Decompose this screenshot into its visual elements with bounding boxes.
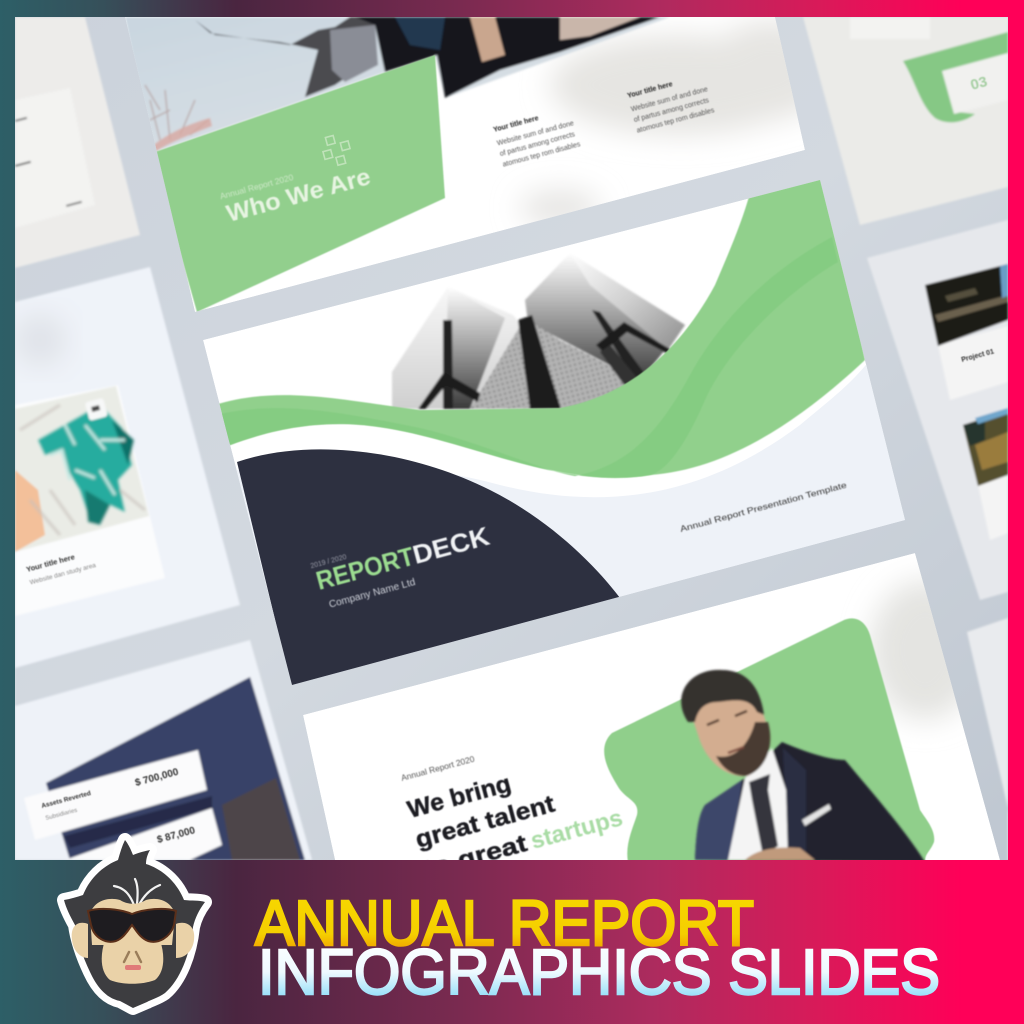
dark title shape bbox=[237, 449, 620, 690]
project photo 1 bbox=[925, 264, 1008, 346]
finance figures: Assets Reverted bbox=[41, 790, 92, 810]
title: infographics slides: INFOGRAPHICS SLIDES bbox=[258, 936, 940, 1008]
text block 2: Website sum of and done bbox=[630, 86, 709, 113]
project photo 2 bbox=[963, 411, 1008, 486]
muzzle bbox=[102, 940, 163, 984]
finance figures: $ 700,000 bbox=[134, 767, 180, 789]
green wave bbox=[215, 170, 865, 478]
map image bbox=[15, 386, 149, 552]
headline: We bring bbox=[405, 770, 514, 824]
project card 2 bbox=[978, 475, 1008, 540]
panel: great talent slide bbox=[303, 553, 1000, 884]
card: location bbox=[15, 385, 165, 616]
text block 1: Website sum of and done bbox=[496, 120, 575, 147]
slide base bbox=[303, 553, 1000, 860]
finance figures: $ 87,000 bbox=[156, 825, 197, 846]
title: report deck: 2019 / 2020 bbox=[310, 554, 347, 570]
headline: startups bbox=[528, 805, 626, 855]
caption: annual report template: Annual Report Presentation Template bbox=[679, 480, 848, 534]
heading: who we are: Who We Are bbox=[224, 163, 374, 228]
sunglasses bbox=[88, 909, 176, 942]
navy image bbox=[46, 677, 305, 860]
text block 2: atomous tep rom disables bbox=[636, 107, 716, 135]
forehead bbox=[90, 899, 175, 945]
skyscraper image bbox=[392, 253, 685, 409]
panel: bottom right sliver slide bbox=[967, 618, 1020, 860]
green title panel bbox=[152, 55, 445, 312]
panel: left bottom finance slide bbox=[15, 640, 312, 860]
text block 2: Your title here bbox=[627, 81, 674, 100]
darker wave layer bbox=[215, 237, 838, 478]
heading: who we are: Annual Report 2020 bbox=[219, 172, 295, 201]
text block 1: Your title here bbox=[493, 115, 540, 134]
eyes and mouth bbox=[707, 711, 747, 725]
icon: network mark bbox=[322, 134, 351, 166]
slide base bbox=[125, 17, 805, 312]
ears bbox=[72, 923, 88, 958]
lower pale background bbox=[236, 364, 905, 597]
green blob bbox=[604, 618, 934, 862]
card 03 bbox=[942, 53, 1008, 114]
text block: annual report label: Annual Report 2020 bbox=[400, 754, 476, 783]
label 03: 03 bbox=[969, 73, 989, 94]
title: report deck: Company Name Ltd bbox=[328, 577, 417, 611]
shirt bbox=[728, 748, 788, 860]
text block 1: of partus among corrects bbox=[499, 131, 576, 158]
panel: top-right agenda slide bbox=[803, 17, 1008, 225]
project card 1 bbox=[938, 326, 1008, 400]
pocket square bbox=[802, 804, 831, 826]
headline bbox=[405, 745, 626, 884]
caption: map card: Your title here bbox=[25, 552, 76, 574]
green curve bbox=[903, 32, 1008, 122]
nose and mouth bbox=[124, 952, 141, 962]
slide base bbox=[203, 198, 866, 498]
title: report deck: REPORT bbox=[313, 541, 417, 596]
text block 2 bbox=[626, 82, 715, 134]
cloud shading bbox=[870, 580, 980, 720]
title: report deck bbox=[310, 526, 491, 608]
text block 1: atomous tep rom disables bbox=[502, 141, 582, 169]
panel: left map slide bbox=[14, 267, 240, 668]
man portrait bbox=[681, 670, 925, 862]
panel: right projects slide bbox=[867, 220, 1008, 600]
text block 2: of partus among corrects bbox=[633, 97, 710, 124]
hand bbox=[745, 848, 815, 860]
beard bbox=[716, 722, 770, 776]
panel: top-left slide bbox=[15, 17, 140, 268]
finance figures: Subsidiaries bbox=[45, 808, 78, 822]
tie bbox=[749, 774, 778, 856]
panel: report deck cover slide bbox=[200, 170, 920, 700]
hair bbox=[681, 670, 764, 722]
headline: to great bbox=[421, 830, 530, 884]
card 2 bbox=[65, 808, 222, 860]
panel: who we are slide bbox=[125, 17, 830, 312]
hair highlight bbox=[114, 879, 160, 905]
card 1 bbox=[24, 750, 207, 840]
sticker head with white outline bbox=[64, 840, 205, 1008]
jacket bbox=[695, 742, 925, 862]
title: report deck: DECK bbox=[409, 521, 493, 570]
face bbox=[688, 688, 769, 776]
caption: map card bbox=[26, 554, 96, 585]
collage backdrop bbox=[15, 17, 1008, 860]
text block 1 bbox=[492, 116, 581, 168]
headline: great talent bbox=[413, 791, 558, 854]
logo: monkey with sunglasses bbox=[64, 840, 205, 1008]
title: annual report: ANNUAL REPORT bbox=[255, 887, 754, 959]
cloud shading bbox=[520, 17, 798, 223]
caption: map card: Website dan study area bbox=[29, 562, 97, 586]
caption: project: Project 01 bbox=[961, 348, 995, 364]
team photo bbox=[125, 17, 670, 153]
finance figures bbox=[41, 767, 197, 846]
